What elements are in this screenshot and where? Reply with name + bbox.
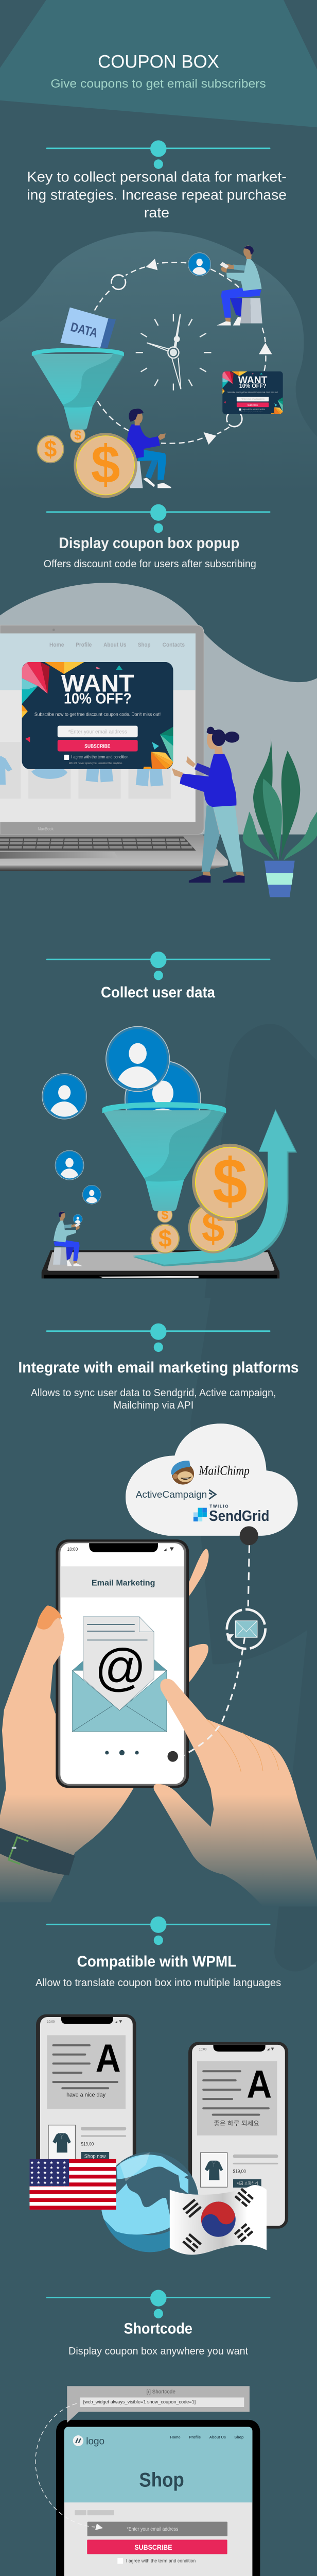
shortcode callout	[67, 2386, 250, 2423]
tablet with shop page: Shop	[139, 2469, 184, 2492]
English phone: $19,00	[81, 2141, 94, 2147]
small coin under funnel: $	[162, 1208, 168, 1222]
user icon left small	[82, 1185, 101, 1204]
description: integrate	[31, 1387, 276, 1411]
small funnel coin	[70, 427, 85, 443]
phone: 10:00	[67, 1547, 78, 1552]
coupon popup: SUBSCRIBE	[84, 743, 111, 749]
globe	[101, 2152, 199, 2252]
tablet with shop page: Home	[170, 2435, 181, 2439]
user icon left medium	[55, 1150, 84, 1180]
gray wall blob	[0, 583, 317, 835]
left coin	[37, 435, 64, 463]
left hand	[0, 1606, 134, 1902]
description: integrate: Mailchimp via API	[113, 1400, 193, 1411]
phone: Email Marketing	[92, 1579, 155, 1587]
phone in hands illustration	[0, 1526, 317, 1945]
heading: display popup: Display coupon box popup	[59, 535, 239, 552]
woman pointing	[172, 727, 244, 883]
Korean phone	[188, 2042, 288, 2229]
tablet with shop page: I agree with the term and condition	[126, 2558, 196, 2564]
left thumb over phone	[34, 1606, 64, 1665]
tablet with shop page	[56, 2420, 260, 2576]
hero background blob	[0, 231, 317, 497]
Korean phone: 좋은 하루 되세요	[214, 2120, 259, 2127]
arrowheads	[146, 259, 272, 445]
intro text: Key to collect personal data for market-	[27, 169, 287, 184]
sendgrid logo: SendGrid	[209, 1508, 269, 1524]
tablet with shop page: SUBSCRIBE	[134, 2544, 172, 2551]
DATA document	[60, 308, 116, 348]
description: integrate: Allows to sync user data to Sendgrid, Active campaign,	[31, 1387, 276, 1399]
small coin under funnel	[157, 1207, 172, 1223]
shortcode callout: [/] Shortcode	[147, 2389, 175, 2395]
intro text: ing strategies. Increase repeat purchase	[27, 187, 287, 202]
mini coupon popup	[222, 371, 283, 414]
carousel dots	[105, 1750, 139, 1755]
section marker	[46, 952, 270, 980]
intro text	[27, 169, 287, 221]
laptop lid: Shop	[138, 642, 151, 648]
left coin: $	[44, 436, 57, 462]
right hand	[154, 1679, 317, 1906]
English phone: A	[96, 2037, 121, 2080]
tablet with shop page: Shop	[234, 2435, 244, 2439]
description: WPML: Allow to translate coupon box into multiple languages	[36, 1977, 281, 1989]
integrate section	[18, 1324, 299, 1536]
funnel	[32, 348, 124, 430]
tablet with shop page: About Us	[209, 2435, 226, 2439]
heading: integrate: Integrate with email marketing platforms	[18, 1360, 299, 1376]
mini coupon popup: *Enter your email address	[241, 398, 265, 400]
watch strap	[0, 1828, 75, 1875]
large coin	[192, 1144, 268, 1221]
Korean phone: $19,00	[233, 2168, 246, 2175]
mini coupon popup: SUBSCRIBE	[248, 403, 258, 406]
laptop lid: Profile	[76, 642, 92, 648]
small funnel coin: $	[74, 428, 81, 443]
Korean flag	[170, 2185, 267, 2255]
coin stack	[150, 1224, 180, 1253]
English phone: Shop now	[84, 2154, 106, 2160]
mini coupon popup: Subscribe now to get free discount coupon code. Don't miss out!	[227, 392, 278, 394]
big coin	[74, 433, 137, 498]
back fingers	[188, 1549, 209, 1683]
header light banner	[0, 0, 317, 127]
funnel	[102, 1102, 226, 1211]
shortcode section	[36, 2290, 270, 2576]
English phone: have a nice day	[66, 2092, 105, 2098]
clock	[136, 314, 212, 391]
sendgrid logo: TWILIO	[209, 1504, 228, 1509]
front user icon	[106, 1026, 169, 1092]
phone lying flat	[42, 1250, 279, 1278]
medium coin: $	[202, 1204, 224, 1251]
dashed arrow to form	[36, 2403, 103, 2530]
coin stack: $	[158, 1225, 172, 1252]
section marker	[46, 1917, 270, 1945]
coupon popup: We will never spam you, unsubscribe anytime.	[69, 762, 123, 765]
English phone: 10:00	[47, 2021, 55, 2024]
background shape: rear right darker panel	[190, 1024, 317, 1971]
big coin: $	[91, 434, 120, 495]
mini coupon popup: I agree with the term and condition	[242, 409, 265, 411]
English phone	[36, 2014, 136, 2200]
hero illustration	[32, 246, 283, 570]
coupon popup: 10% OFF?	[64, 690, 132, 707]
potted plant	[243, 738, 317, 897]
seated person	[53, 1211, 82, 1266]
US flag	[29, 2159, 116, 2210]
Korean phone: 지금 쇼핑하기	[237, 2181, 258, 2185]
WPML section	[29, 1954, 288, 2255]
laptop lid: Home	[49, 642, 64, 648]
laptop popup scene	[0, 583, 317, 980]
laptop lid: Contacts	[163, 642, 185, 648]
large coin: $	[213, 1146, 248, 1217]
user icon	[188, 253, 211, 276]
section marker	[46, 2290, 270, 2318]
mailchimp mascot	[171, 1461, 194, 1485]
cloud to phone connector	[168, 1526, 258, 1762]
Korean phone: 10:00	[199, 2048, 207, 2052]
email envelope: @	[95, 1639, 146, 1697]
medium coin	[188, 1202, 238, 1253]
coupon popup: *Enter your email address	[68, 729, 127, 735]
dashed flow arrows	[93, 262, 266, 444]
collect user data section	[42, 985, 297, 1278]
email envelope	[73, 1617, 167, 1732]
user icon left large	[42, 1074, 86, 1119]
laptop lid: MacBook	[38, 827, 54, 832]
section marker	[46, 140, 270, 169]
laptop lid: About Us	[103, 642, 127, 648]
user icon tiny	[73, 1214, 82, 1224]
tablet with shop page: logo	[86, 2436, 104, 2447]
mini coupon popup: 10% OFF?	[239, 383, 267, 389]
mini coupon popup: We will never spam you, unsubscribe anytime.	[241, 411, 263, 413]
laptop lid	[0, 625, 204, 835]
mini coupon popup: WANT	[238, 375, 268, 385]
cloud with logos	[126, 1423, 298, 1536]
heading: shortcode: Shortcode	[124, 2320, 192, 2337]
intro text: rate	[144, 205, 169, 221]
laptop base	[0, 835, 228, 871]
sync envelope icon	[226, 1609, 266, 1649]
mailchimp wordmark: MailChimp	[199, 1464, 250, 1478]
coupon popup	[22, 662, 173, 769]
coupon popup: WANT	[61, 670, 134, 697]
tablet with shop page: *Enter your email address	[127, 2527, 178, 2532]
shortcode callout: [wcb_widget always_visible=1 show_coupon_code=1]	[83, 2399, 196, 2405]
coupon popup: Subscribe now to get free discount coupon code. Don't miss out!	[34, 711, 161, 717]
seated person with tablet	[217, 246, 262, 326]
section marker	[46, 1324, 270, 1352]
heading: collect user data: Collect user data	[101, 985, 216, 1001]
DATA document: DATA	[69, 320, 99, 341]
subtitle: Give coupons to get email subscribers	[50, 77, 266, 90]
section marker	[46, 504, 270, 533]
heading: WPML: Compatible with WPML	[77, 1954, 236, 1970]
header section	[0, 0, 317, 497]
tablet with shop page: Profile	[189, 2435, 201, 2439]
coupon popup: I agree with the term and condition	[72, 755, 129, 759]
title: COUPON BOX	[98, 52, 219, 72]
sendgrid logo	[193, 1504, 269, 1524]
description: display popup: Offers discount code for users after subscribing	[44, 558, 256, 570]
Korean phone: A	[246, 2063, 272, 2106]
description: shortcode: Display coupon box anywhere you want	[68, 2346, 249, 2357]
growth arrow	[133, 1109, 297, 1266]
phone	[56, 1539, 189, 1788]
seated person in blue	[127, 409, 171, 488]
back user icon	[125, 1061, 201, 1138]
finger creases	[206, 1719, 278, 1772]
activecampaign wordmark: ActiveCampaign	[136, 1489, 207, 1500]
